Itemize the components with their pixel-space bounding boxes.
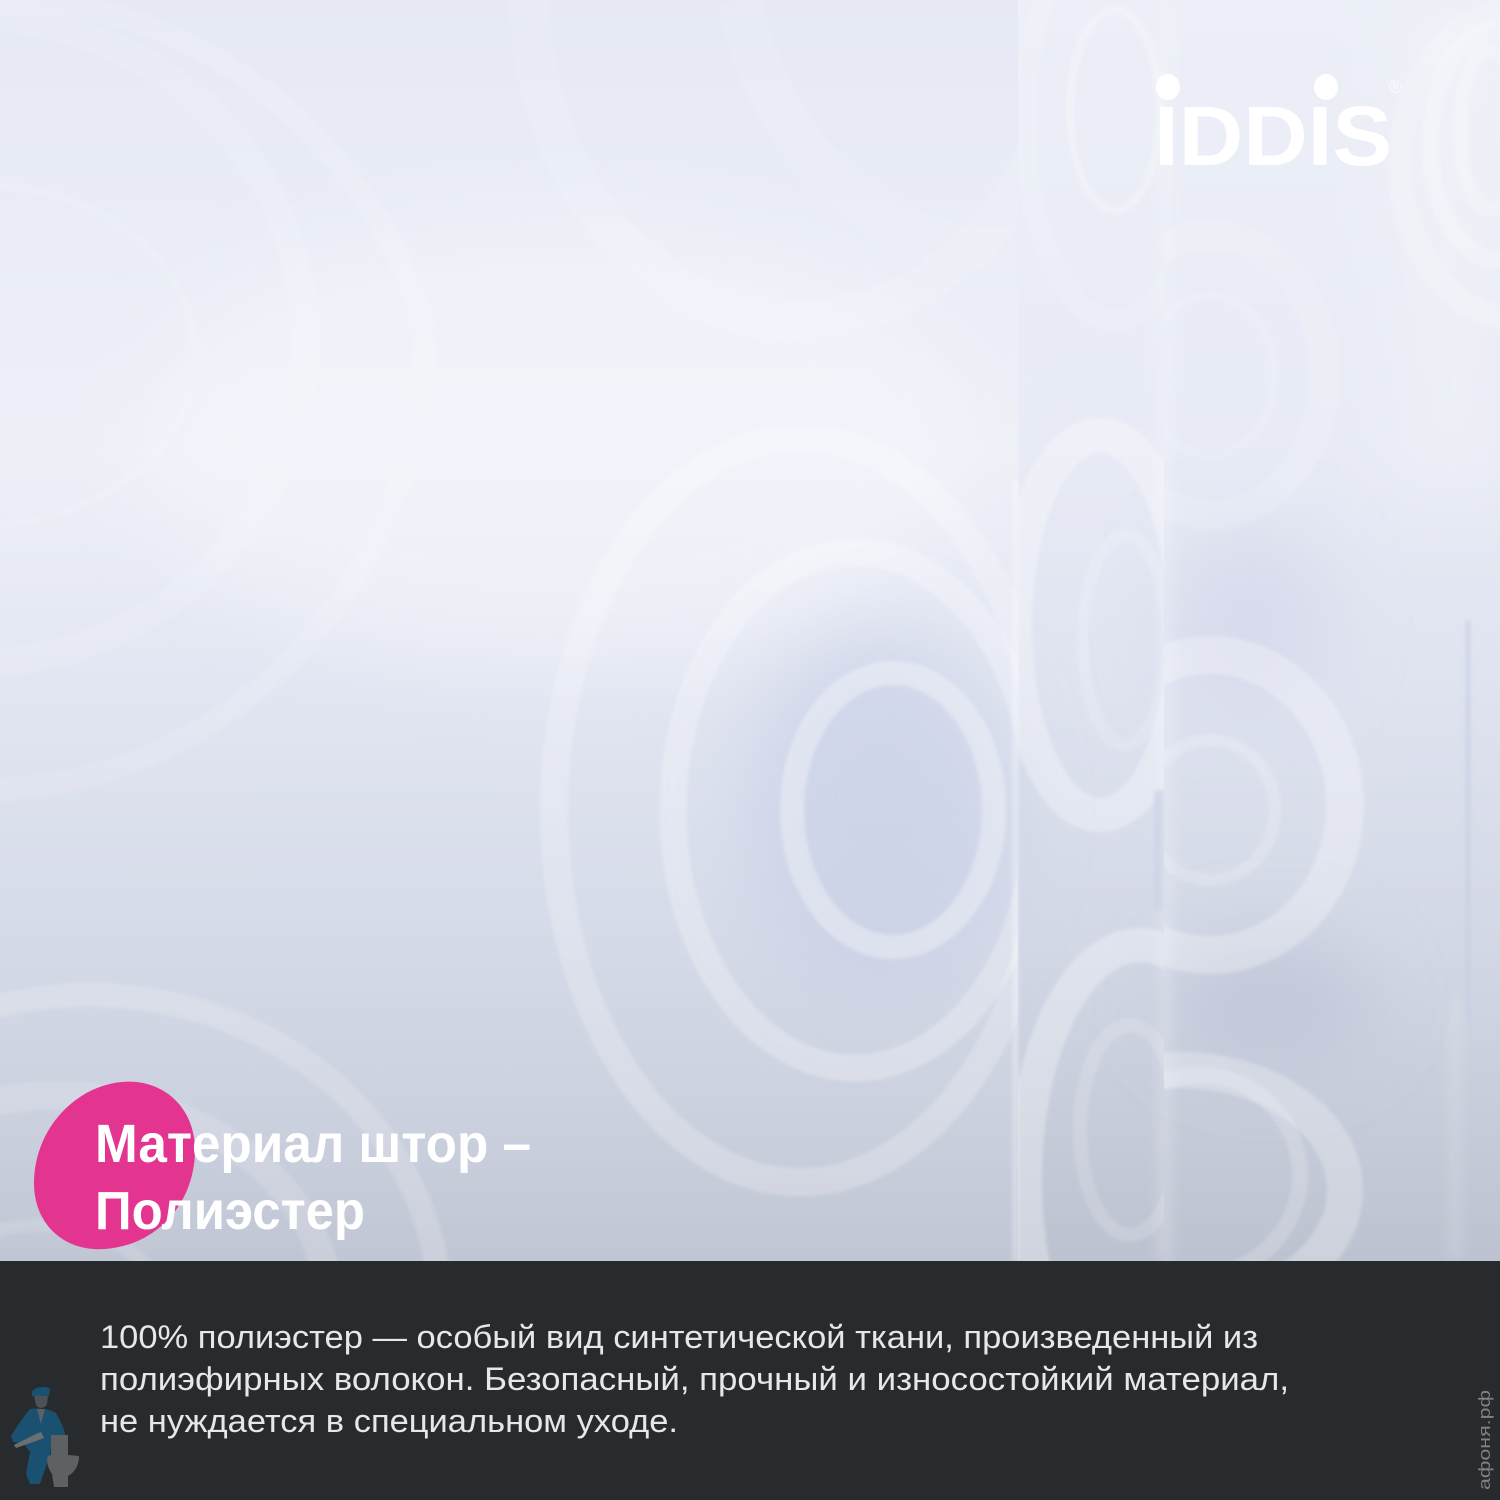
- logo: iDDiS: IDDIS: [1154, 89, 1392, 183]
- icon: plumber with toilet: [11, 1387, 79, 1487]
- watermark: site name: афоня.рф: [1475, 1390, 1494, 1490]
- accent blob: pink: [34, 1082, 195, 1249]
- text block: description: [100, 1319, 1289, 1439]
- heading: material title: [95, 1114, 531, 1241]
- text block: description: не нуждается в специальном уходе.: [100, 1403, 678, 1439]
- logo: iDDiS: ®: [1389, 77, 1402, 97]
- text block: description: 100% полиэстер — особый вид синтетической ткани, произведенный из: [100, 1319, 1258, 1355]
- heading: material title: Полиэстер: [95, 1181, 365, 1241]
- panel: dark description band: [0, 1261, 1500, 1500]
- text block: description: полиэфирных волокон. Безопасный, прочный и износостойкий материал,: [100, 1361, 1289, 1397]
- heading: material title: Материал штор –: [95, 1114, 531, 1174]
